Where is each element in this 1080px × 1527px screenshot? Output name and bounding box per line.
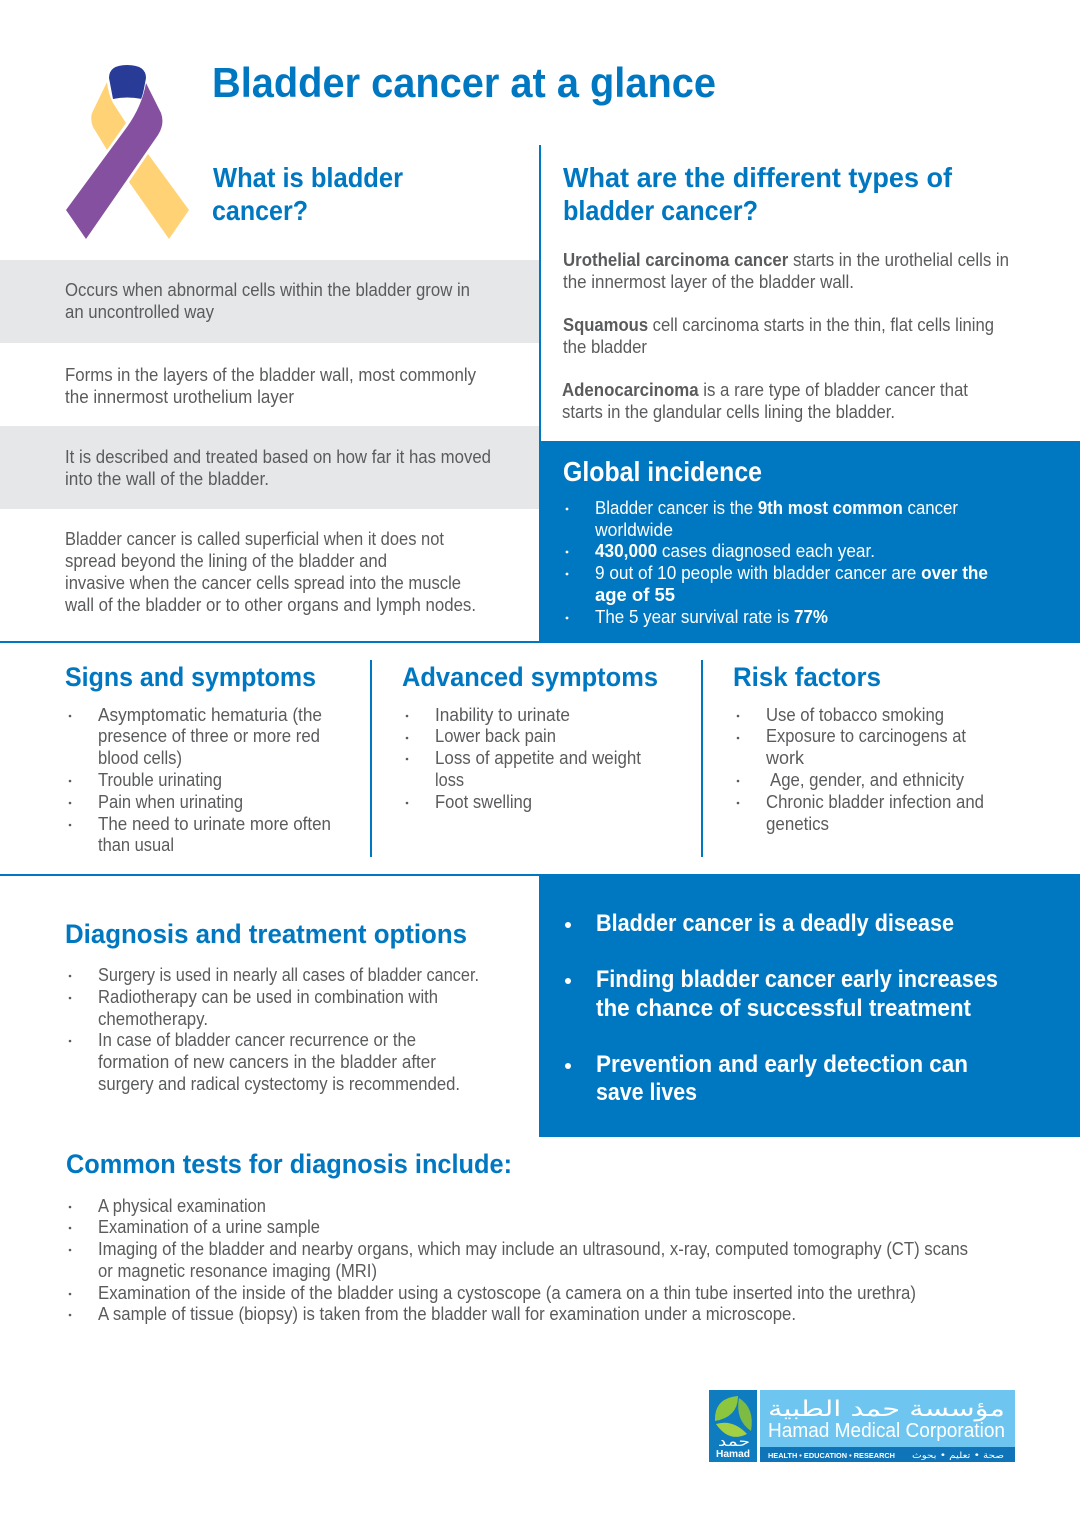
heading: advanced symptoms: Advanced symptoms <box>402 662 658 692</box>
logo: Hamad Medical Corporation: صحة • تعليم • بحوث <box>912 1451 1004 1461</box>
list: risk factors: Exposure to carcinogens at <box>766 726 966 746</box>
heading: types of bladder cancer: bladder cancer? <box>563 195 758 226</box>
list: global incidence facts: 430,000 cases diagnosed each year. <box>595 541 875 561</box>
panel: diagnosis and treatment options <box>65 919 479 1094</box>
logo: Hamad Medical Corporation: حمد <box>718 1434 750 1450</box>
text block: types of bladder cancer: the bladder <box>563 337 647 357</box>
heading: types of bladder cancer <box>563 162 953 226</box>
text block: types of bladder cancer: Squamous cell carcinoma starts in the thin, flat cells lining <box>563 315 994 335</box>
list: advanced symptoms: Foot swelling <box>435 792 532 812</box>
list: global incidence facts: The 5 year survival rate is 77% <box>595 607 828 627</box>
list: common tests <box>69 1196 968 1324</box>
panel: key messages: Bladder cancer is a deadly disease <box>596 910 954 937</box>
list: diagnosis and treatment <box>69 965 479 1094</box>
panel: key messages <box>539 874 1080 1137</box>
list: risk factors: Chronic bladder infection and <box>766 792 984 812</box>
text block: definition rows: It is described and treated based on how far it has moved <box>65 447 491 467</box>
list: diagnosis and treatment: Surgery is used in nearly all cases of bladder cancer. <box>98 965 479 985</box>
list: risk factors: work <box>765 748 805 768</box>
list: signs and symptoms <box>69 705 331 855</box>
list: global incidence facts: worldwide <box>594 520 673 540</box>
list: advanced symptoms: Inability to urinate <box>435 705 570 725</box>
logo: Hamad Medical Corporation: HEALTH • EDUCATION • RESEARCH <box>768 1451 895 1460</box>
text block: definition rows: Forms in the layers of the bladder wall, most commonly <box>65 365 476 385</box>
grey band 2 <box>0 426 539 509</box>
list: signs and symptoms: Asymptomatic hematuria (the <box>98 705 322 725</box>
text block: definition rows: invasive when the cancer cells spread into the muscle <box>65 573 461 593</box>
list: global incidence facts <box>566 498 988 627</box>
list: signs and symptoms: The need to urinate more often <box>98 814 331 834</box>
heading: what is bladder cancer: What is bladder <box>213 162 403 193</box>
icon: awareness ribbon <box>66 65 189 239</box>
list: advanced symptoms: loss <box>435 770 464 790</box>
panel: signs and symptoms <box>65 662 331 855</box>
panel: common tests <box>66 1149 968 1324</box>
text block: types of bladder cancer <box>562 250 1009 422</box>
list: common tests: Imaging of the bladder and nearby organs, which may include an ultrasound, x-ray, computed tomography (CT) scans <box>98 1239 968 1259</box>
list: global incidence facts: age of 55 <box>595 585 675 605</box>
list: common tests: A sample of tissue (biopsy) is taken from the bladder wall for examination under a microscope. <box>98 1304 796 1324</box>
grey band 1 <box>0 260 539 343</box>
logo: Hamad Medical Corporation: مؤسسة حمد الطبية <box>768 1397 1005 1422</box>
list: signs and symptoms: Pain when urinating <box>98 792 243 812</box>
list: signs and symptoms: Trouble urinating <box>98 770 222 790</box>
panel: advanced symptoms <box>402 662 658 812</box>
text block: definition rows: an uncontrolled way <box>65 302 214 322</box>
list: common tests: or magnetic resonance imaging (MRI) <box>98 1261 377 1281</box>
list: common tests: A physical examination <box>98 1196 266 1216</box>
list: common tests: Examination of a urine sample <box>98 1217 320 1237</box>
text block: definition rows: into the wall of the bladder. <box>65 469 269 489</box>
list: diagnosis and treatment: chemotherapy. <box>98 1009 208 1029</box>
heading: what is bladder cancer <box>212 162 403 226</box>
text block: definition rows <box>64 280 491 615</box>
list: signs and symptoms: presence of three or more red <box>98 726 320 746</box>
list: risk factors: Use of tobacco smoking <box>766 705 944 725</box>
text block: types of bladder cancer: starts in the glandular cells lining the bladder. <box>562 402 895 422</box>
heading: diagnosis and treatment: Diagnosis and treatment options <box>65 919 467 949</box>
heading: what is bladder cancer: cancer? <box>212 195 308 226</box>
list: signs and symptoms: blood cells) <box>98 748 182 768</box>
logo: Hamad Medical Corporation: Hamad <box>716 1448 750 1460</box>
panel: key messages: save lives <box>596 1079 697 1106</box>
text block: definition rows: Occurs when abnormal cells within the bladder grow in <box>65 280 470 300</box>
list: risk factors: Age, gender, and ethnicity <box>770 770 964 790</box>
list: global incidence facts: 9 out of 10 people with bladder cancer are over the <box>595 563 988 583</box>
panel: key messages: Finding bladder cancer early increases <box>596 966 998 993</box>
list: common tests: Examination of the inside of the bladder using a cystoscope (a camera on a thin tube inserted into the urethra) <box>98 1283 916 1303</box>
list: advanced symptoms: Lower back pain <box>435 726 556 746</box>
list: risk factors <box>737 705 984 834</box>
heading: types of bladder cancer: What are the different types of <box>563 162 953 193</box>
heading: risk factors: Risk factors <box>733 662 881 692</box>
list: advanced symptoms: Loss of appetite and weight <box>435 748 641 768</box>
list: diagnosis and treatment: surgery and radical cystectomy is recommended. <box>98 1074 460 1094</box>
heading: signs and symptoms: Signs and symptoms <box>65 662 316 692</box>
heading: common tests: Common tests for diagnosis include: <box>66 1149 512 1179</box>
text block: definition rows: spread beyond the lining of the bladder and <box>65 551 387 571</box>
text block: definition rows: wall of the bladder or to other organs and lymph nodes. <box>64 595 476 615</box>
logo: Hamad Medical Corporation: Hamad Medical Corporation <box>768 1420 1005 1442</box>
title: Bladder cancer at a glance <box>212 59 716 106</box>
panel: global incidence <box>541 441 1080 642</box>
text block: types of bladder cancer: Urothelial carcinoma cancer starts in the urothelial cells in <box>563 250 1009 270</box>
panel: key messages: Prevention and early detection can <box>596 1051 968 1078</box>
panel: risk factors <box>733 662 984 834</box>
text block: types of bladder cancer: Adenocarcinoma is a rare type of bladder cancer that <box>562 380 968 400</box>
text block: types of bladder cancer: the innermost layer of the bladder wall. <box>563 272 854 292</box>
list: global incidence facts: Bladder cancer is the 9th most common cancer <box>595 498 958 518</box>
list: advanced symptoms <box>406 705 641 812</box>
list: diagnosis and treatment: In case of bladder cancer recurrence or the <box>98 1030 416 1050</box>
logo: Hamad Medical Corporation <box>709 1390 1015 1462</box>
list: signs and symptoms: than usual <box>98 835 174 855</box>
text block: definition rows: the innermost urothelium layer <box>65 387 294 407</box>
heading: global incidence: Global incidence <box>563 456 762 487</box>
text block: definition rows: Bladder cancer is called superficial when it does not <box>65 529 444 549</box>
list: diagnosis and treatment: formation of new cancers in the bladder after <box>98 1052 436 1072</box>
list: risk factors: genetics <box>766 814 829 834</box>
panel: key messages: the chance of successful treatment <box>596 995 971 1022</box>
list: diagnosis and treatment: Radiotherapy can be used in combination with <box>98 987 438 1007</box>
